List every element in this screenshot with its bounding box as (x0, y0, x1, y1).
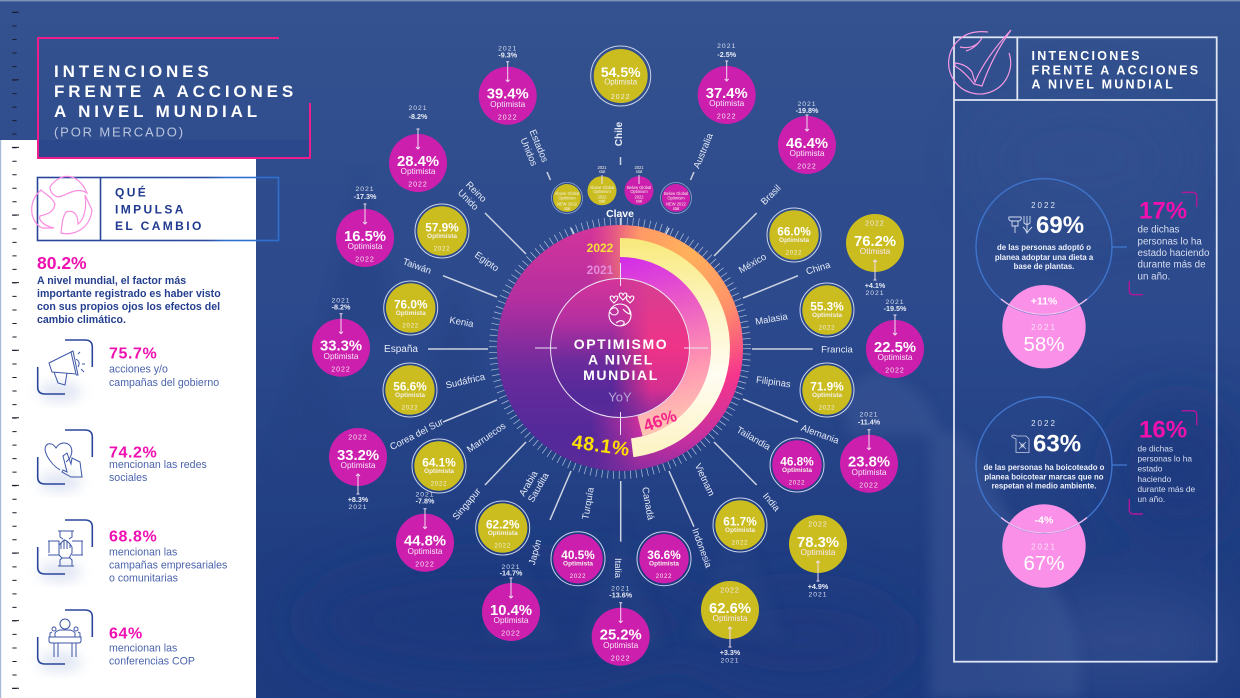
bubble: Malasia: 55.3% (810, 299, 844, 313)
bubble: Sudafrica: 2022 (402, 405, 418, 411)
stat group: brand boycott: 2022 (1031, 419, 1057, 428)
bubble: Indonesia: 2022 (720, 587, 740, 594)
stat: 80.2% (37, 253, 221, 326)
bubble: China: 76.2% (854, 234, 896, 250)
country labels: España (384, 344, 418, 355)
heading: INTENCIONES (1032, 49, 1142, 63)
bubble: Kenia (384, 281, 438, 335)
country labels: Singapur (451, 486, 484, 522)
bubble: Espana: 2021 (331, 298, 351, 305)
bubble: Japon: Optimista (493, 615, 529, 625)
bubble: Brasil: -19.8% (796, 106, 819, 115)
bubble: Estados Unidos: -9.3% (498, 51, 518, 60)
inner disk right tint (550, 278, 690, 418)
bubble: Marruecos: 2022 (431, 481, 447, 487)
bubble: Canada: Optimista (649, 561, 679, 568)
stat: 80.2%: cambio climático. (37, 314, 126, 326)
center label: A NIVEL (588, 352, 654, 368)
bubble: Canada: 36.6% (647, 548, 681, 562)
heading: QUÉ (115, 186, 148, 200)
country labels: Unido (455, 188, 480, 213)
bubble: Italia: -13.6% (609, 591, 633, 600)
bubble: Francia: 2022 (885, 368, 905, 375)
country labels: Marruecos (465, 420, 508, 455)
driver: gobierno: 75.7% (109, 345, 157, 362)
icon: tagged document (1012, 435, 1029, 452)
country labels: Saudita (526, 470, 552, 504)
bubble: Taiwan: 16.5% (344, 229, 386, 245)
bubble: Australia (698, 43, 756, 124)
title: FRENTE A ACCIONES (54, 82, 297, 101)
bubble: Australia: Optimista (709, 98, 745, 108)
bubble: Taiwan: Optimista (347, 241, 383, 251)
country labels: Arabia (517, 468, 541, 498)
driver: campanas empresariales: 68.8% (109, 529, 157, 546)
bubble: Canada: 2022 (656, 574, 672, 580)
bubble: Brasil: 2022 (797, 164, 817, 171)
bubble: Indonesia (701, 581, 759, 664)
bubble: Sudafrica (383, 363, 437, 417)
country labels: Clave (606, 209, 634, 220)
legend: key bubbles: stat (636, 198, 643, 204)
bubble: Kenia: 76.0% (394, 297, 428, 311)
country labels: India (760, 491, 782, 514)
bubble: Chile: Optimista (604, 78, 638, 86)
bubble: Taiwan: 2021 (355, 186, 375, 193)
bubble: Mexico: 2022 (786, 250, 802, 256)
country labels: Filipinas (755, 375, 792, 390)
callout: 17%: estado haciendo (1138, 248, 1210, 259)
bubble: Malasia (800, 283, 854, 337)
driver: campanas empresariales: o comunitarias (109, 573, 178, 585)
bubble: Egipto: 57.9% (425, 220, 459, 234)
ring: 2022 value (620, 248, 720, 448)
chart: radial optimism wheel (428, 157, 813, 542)
bubble: Tailandia (770, 438, 824, 492)
bubble: Singapur: 2021 (415, 492, 435, 499)
bubble: Kenia: 2022 (402, 323, 419, 329)
legend: key bubbles: 2022 (634, 194, 644, 200)
bubble: Tailandia: Optimista (782, 467, 812, 474)
bubble: Taiwan: -17.3% (354, 192, 377, 201)
bubble: Taiwan (336, 186, 394, 267)
bubble: Arabia Saudita: 2022 (494, 543, 511, 549)
subtitle: (POR MERCADO) (54, 124, 185, 140)
bubble: Francia: 2021 (885, 299, 905, 306)
bubble: Arabia Saudita: 62.2% (486, 517, 520, 531)
bubble: Alemania: Optimista (851, 467, 887, 477)
stat group: brand boycott (976, 397, 1127, 588)
title: A NIVEL MUNDIAL (54, 102, 261, 121)
bubble: Espana: Optimista (323, 351, 359, 361)
driver: campanas empresariales: mencionan las (109, 546, 177, 558)
icon: mushroom and fork (1009, 216, 1032, 233)
heading: EL CAMBIO (115, 219, 204, 233)
bubble: Australia: -2.5% (717, 50, 737, 59)
bubble: Malasia: 2022 (819, 325, 835, 331)
bubble: Estados Unidos: Optimista (490, 99, 526, 109)
bubble: Francia: -19.5% (884, 304, 907, 313)
legend: key bubbles: stat (564, 206, 571, 211)
bubble: Filipinas: Optimista (812, 392, 842, 399)
legend: key bubbles: 2021 (597, 165, 607, 170)
bubble: Kenia: Optimista (396, 310, 426, 317)
bubble: Espana: -8.2% (332, 303, 351, 312)
bubble: Turquia: Optimista (563, 561, 593, 568)
icon: megaphone (49, 351, 85, 385)
heading: A NIVEL MUNDIAL (1032, 77, 1175, 91)
bubble: Estados Unidos: 39.4% (487, 87, 529, 103)
country labels: Reino (463, 180, 488, 205)
country labels: Francia (821, 344, 854, 356)
callout: 16%: durante más de (1138, 484, 1196, 494)
country labels (384, 121, 854, 579)
legend: key bubbles: 2022 (597, 194, 607, 200)
callout: 16%: un año. (1138, 494, 1165, 504)
stat group: plant based diet: 2022 (1031, 201, 1057, 210)
bubble: Alemania: 2021 (859, 412, 879, 419)
bubble: Marruecos: 64.1% (422, 455, 456, 469)
country labels: Estados (527, 128, 550, 164)
bubble: Reino Unido: Optimista (400, 166, 436, 176)
bubble: Singapur: 44.8% (404, 534, 446, 550)
callout: 16%: personas lo ha (1138, 454, 1192, 464)
bubble: Malasia: Optimista (812, 312, 842, 319)
legend: key bubbles: Optimism (558, 196, 576, 200)
bubble: Chile: 2022 (611, 94, 630, 101)
legend: key bubbles: Below Global (664, 191, 688, 196)
driver: redes sociales: sociales (109, 472, 147, 484)
bubble: Singapur: -7.8% (416, 497, 435, 506)
bubble: Espana (312, 298, 370, 377)
stat: 80.2%: importante registrado es haber visto (37, 288, 221, 300)
bubble: Canada (637, 532, 691, 586)
bubble: Italia: 2022 (611, 655, 630, 662)
icon: podium speaker (49, 619, 81, 657)
bubble: Singapur (396, 492, 454, 572)
callout: 16%: estado (1138, 464, 1163, 474)
bubble: Alemania (840, 412, 898, 493)
bubble: Australia: 2022 (717, 114, 736, 121)
bubble: Italia: 2021 (611, 586, 630, 593)
legend: key bubbles: NEW 2022 (666, 202, 687, 206)
center label: OPTIMISMO (574, 336, 668, 352)
ring labels: 46% (641, 406, 679, 436)
bubble: Australia: 37.4% (706, 86, 748, 102)
bubble: Estados Unidos: 2022 (498, 114, 517, 121)
center label (574, 336, 668, 383)
center label: MUNDIAL (583, 367, 659, 383)
bubble: Alemania: -11.4% (858, 418, 881, 427)
stat group: plant based diet: planea adoptar una dieta a (995, 253, 1094, 262)
driver: campanas empresariales (38, 520, 227, 585)
stat group: brand boycott: 2021 (1031, 542, 1057, 552)
bubble: Vietnam (713, 498, 767, 552)
bubble: Espana: 2022 (331, 366, 351, 373)
bubble: Mexico (767, 208, 821, 262)
driver: redes sociales: mencionan las redes (109, 459, 207, 471)
legend: key bubbles: stat (636, 169, 643, 174)
disk (497, 225, 743, 471)
bubble: Corea del Sur: 2022 (348, 434, 368, 441)
bubble: Singapur: Optimista (407, 546, 443, 556)
bubble: Italia: 25.2% (600, 628, 642, 644)
bubble: Reino Unido: 2021 (408, 105, 428, 112)
bubble: Vietnam: Optimista (725, 527, 755, 534)
bubble: Corea del Sur: +8.3% (348, 495, 369, 504)
bubble: Francia: 22.5% (874, 340, 916, 356)
bubble: Marruecos (412, 439, 466, 493)
country labels: Australia (692, 131, 716, 170)
stat group: plant based diet: de las personas adoptó o (997, 243, 1091, 252)
stat group: brand boycott: de las personas ha boicoteado o (984, 463, 1104, 472)
driver: conferencias COP: conferencias COP (109, 655, 195, 667)
bubble: Sudafrica: 56.6% (393, 379, 427, 393)
bubble: Reino Unido: 2022 (408, 182, 428, 189)
ring labels: 2022 (587, 241, 614, 255)
stat: 80.2%: con sus propios ojos los efectos del (37, 301, 220, 313)
stat group: plant based diet: 69% (1036, 212, 1084, 239)
bubble: Egipto (415, 204, 469, 258)
legend: key bubbles (552, 165, 692, 214)
driver: redes sociales (38, 430, 207, 492)
icon: pink check (949, 30, 1011, 94)
bubble: Taiwan: 2022 (355, 257, 375, 264)
bubble: Indonesia: +3.3% (720, 648, 741, 657)
bubble: Italia: Optimista (603, 640, 639, 650)
bubble: Singapur: 2022 (415, 561, 435, 568)
bubble: Estados Unidos (479, 46, 537, 125)
bubble: Indonesia: 2021 (720, 658, 740, 664)
icon: recycle leaves (32, 176, 92, 234)
icon: heart hand (45, 443, 82, 477)
stat group: brand boycott: respetan el medio ambiente. (992, 482, 1096, 491)
callout: 16%: 16% (1139, 416, 1187, 443)
country labels: Unidos (518, 136, 539, 168)
bubble: India: 2021 (808, 592, 828, 598)
driver: gobierno: acciones y/o (109, 364, 168, 376)
center circle (535, 263, 708, 435)
bubble: Sudafrica: Optimista (395, 392, 425, 399)
callout: 17%: durante más de (1138, 260, 1206, 271)
country labels: Egipto (472, 250, 501, 274)
legend: key bubbles: Above Global (590, 185, 614, 190)
country labels: Malasia (754, 311, 789, 328)
ring labels: 2021 (587, 263, 614, 277)
panel: white side panel (0, 140, 256, 698)
icon: stacked hands (48, 531, 83, 566)
stat group: plant based diet (976, 179, 1127, 368)
legend: key bubbles: Optimism (667, 196, 685, 200)
ring labels: 48.1% (570, 431, 631, 461)
panel: intenciones frente a acciones (949, 30, 1217, 662)
bubble: Filipinas: 2022 (819, 405, 835, 411)
stat group: plant based diet: 2021 (1031, 323, 1057, 332)
ring: 2021 value (620, 267, 701, 426)
callout: 17%: personas lo ha (1138, 236, 1202, 247)
bubble: Estados Unidos: 2021 (498, 46, 517, 53)
stat group: plant based diet: base de plantas. (1014, 262, 1074, 271)
bubble: Espana: 33.3% (320, 339, 362, 355)
spokes (428, 157, 813, 542)
bubble: Brasil: 2021 (797, 101, 817, 108)
bubble: Brasil (778, 101, 836, 174)
bubble: Japon: 10.4% (490, 603, 532, 619)
stat group: plant based diet: +11% (1031, 296, 1058, 308)
driver: redes sociales: 74.2% (109, 444, 157, 461)
bubble: Corea del Sur: 2021 (348, 504, 368, 511)
legend: key bubbles: Above Global (555, 191, 579, 196)
country labels: Tailandia (734, 425, 773, 453)
bubble: China: 2022 (865, 220, 885, 227)
country labels: Vietnam (692, 462, 717, 498)
bubble: Reino Unido: 28.4% (397, 154, 439, 170)
bubble: Egipto: Optimista (427, 233, 457, 240)
stat: 80.2%: A nivel mundial, el factor más (37, 275, 186, 287)
bubble: India: 2022 (808, 521, 828, 528)
country labels: Turquía (580, 486, 597, 520)
heading: IMPULSA (115, 202, 186, 216)
country labels: China (805, 260, 832, 277)
country labels: Japón (527, 538, 544, 566)
bubble: Corea del Sur (329, 428, 387, 511)
bubble: Reino Unido: -8.2% (409, 112, 428, 121)
tick ring (493, 221, 747, 475)
ruler ticks (14, 12, 16, 690)
bubble: Vietnam: 61.7% (723, 514, 757, 528)
panel: title box (38, 38, 310, 158)
callout: 16%: de dichas (1138, 444, 1173, 454)
bubble: India: 78.3% (797, 535, 839, 551)
bubble: Japon: 2022 (501, 631, 521, 638)
stat group: plant based diet: 58% (1023, 333, 1065, 356)
driver: gobierno (38, 340, 219, 402)
bubble: Francia: Optimista (877, 352, 913, 362)
country labels: Chile (614, 121, 625, 146)
bubble: China: Otimista (860, 246, 891, 256)
bubble: India: Optimista (800, 547, 836, 557)
bubble: Australia: 2021 (717, 43, 736, 50)
stat group: brand boycott: -4% (1035, 514, 1054, 526)
callout: 17%: un año. (1138, 271, 1170, 282)
bubble: Tailandia: 46.8% (780, 454, 814, 468)
bubble: Brasil: 46.4% (786, 136, 828, 152)
country labels: Canadá (639, 486, 656, 522)
title: INTENCIONES (54, 62, 213, 81)
country labels: México (737, 252, 769, 276)
bubble: Chile (591, 46, 651, 106)
legend: key bubbles: 2021 (634, 165, 644, 170)
bubble: Mexico: Optimista (779, 237, 809, 244)
bubble: Japon: 2021 (501, 564, 521, 571)
driver: gobierno: campañas del gobierno (109, 377, 219, 389)
bubble: Brasil: Optimista (789, 148, 825, 158)
stat: 80.2%: 80.2% (37, 253, 87, 273)
bubble: Japon (482, 564, 540, 641)
callout: 17%: de dichas (1138, 225, 1179, 236)
bubble: India (789, 515, 847, 598)
bubble: Turquia: 2022 (570, 574, 586, 580)
icon: globe with hearts (609, 293, 634, 326)
bubble: Turquia (551, 532, 605, 586)
bubble: Tailandia: 2022 (789, 480, 805, 486)
country labels: Corea del Sur (388, 417, 445, 453)
bubble: Mexico: 66.0% (777, 224, 811, 238)
bubble: Arabia Saudita: Optimista (488, 530, 518, 537)
driver: campanas empresariales: campañas empresariales (109, 559, 227, 571)
legend: key bubbles: Below Global (627, 185, 651, 190)
country labels: Brasil (759, 183, 784, 208)
callout: 17%: 17% (1139, 197, 1187, 224)
legend: key bubbles: stat (673, 206, 680, 211)
bubble: Japon: -14.7% (500, 568, 523, 578)
country labels: Italia (612, 558, 623, 579)
country labels: Alemania (799, 423, 841, 447)
bubble: Filipinas: 71.9% (810, 379, 844, 393)
bubble: Francia (866, 299, 924, 378)
country labels: Taiwán (401, 256, 433, 277)
bubble: Reino Unido (389, 105, 447, 192)
country labels: Indonesia (689, 527, 714, 570)
bubble: China: 2021 (865, 290, 885, 297)
stat group: brand boycott: planea boicotear marcas que no (984, 472, 1104, 481)
bubble: China (846, 214, 904, 297)
bubble: Marruecos: Optimista (424, 468, 454, 475)
bubble: Egipto: 2022 (434, 246, 450, 252)
bubble: Alemania: 23.8% (848, 455, 890, 471)
bubble: Turquia: 40.5% (561, 548, 595, 562)
heading: FRENTE A ACCIONES (1032, 63, 1200, 77)
bubble: Arabia Saudita (476, 501, 530, 555)
panel: que impulsa el cambio header (32, 176, 279, 240)
legend: key bubbles: stat (599, 169, 606, 174)
callout: 16%: haciendo (1138, 474, 1172, 484)
bubble: India: +4.9% (808, 582, 829, 591)
stat group: brand boycott: 67% (1023, 552, 1065, 575)
bubble: Alemania: 2022 (859, 482, 879, 489)
legend: key bubbles: NEW 2022 (557, 202, 578, 206)
bubble: Indonesia: Optimista (712, 613, 748, 623)
legend: key bubbles: Optimism (630, 189, 648, 194)
bubble: Filipinas (800, 363, 854, 417)
callout: 16% (1129, 411, 1197, 514)
yoy label: YoY (608, 390, 632, 404)
bubble: Corea del Sur: 33.2% (337, 448, 379, 464)
driver: conferencias COP (38, 610, 195, 672)
ring labels (570, 241, 679, 461)
legend: key bubbles: stat (599, 198, 606, 204)
bubble: Italia (592, 586, 650, 666)
bubble: Indonesia: 62.6% (709, 601, 751, 617)
bubble: China: +4.1% (865, 281, 886, 290)
bubble: Chile: 54.5% (601, 64, 641, 80)
legend: key bubbles: Optimism (593, 189, 611, 194)
bubble: Corea del Sur: Optimista (340, 460, 376, 470)
country labels: Sudáfrica (445, 372, 487, 391)
bubble: Vietnam: 2022 (732, 540, 748, 546)
driver: conferencias COP: mencionan las (109, 643, 177, 655)
callout: 17% (1129, 192, 1210, 295)
stat group: brand boycott: 63% (1033, 431, 1081, 458)
driver: conferencias COP: 64% (109, 625, 143, 642)
country labels: Kenia (449, 315, 475, 330)
